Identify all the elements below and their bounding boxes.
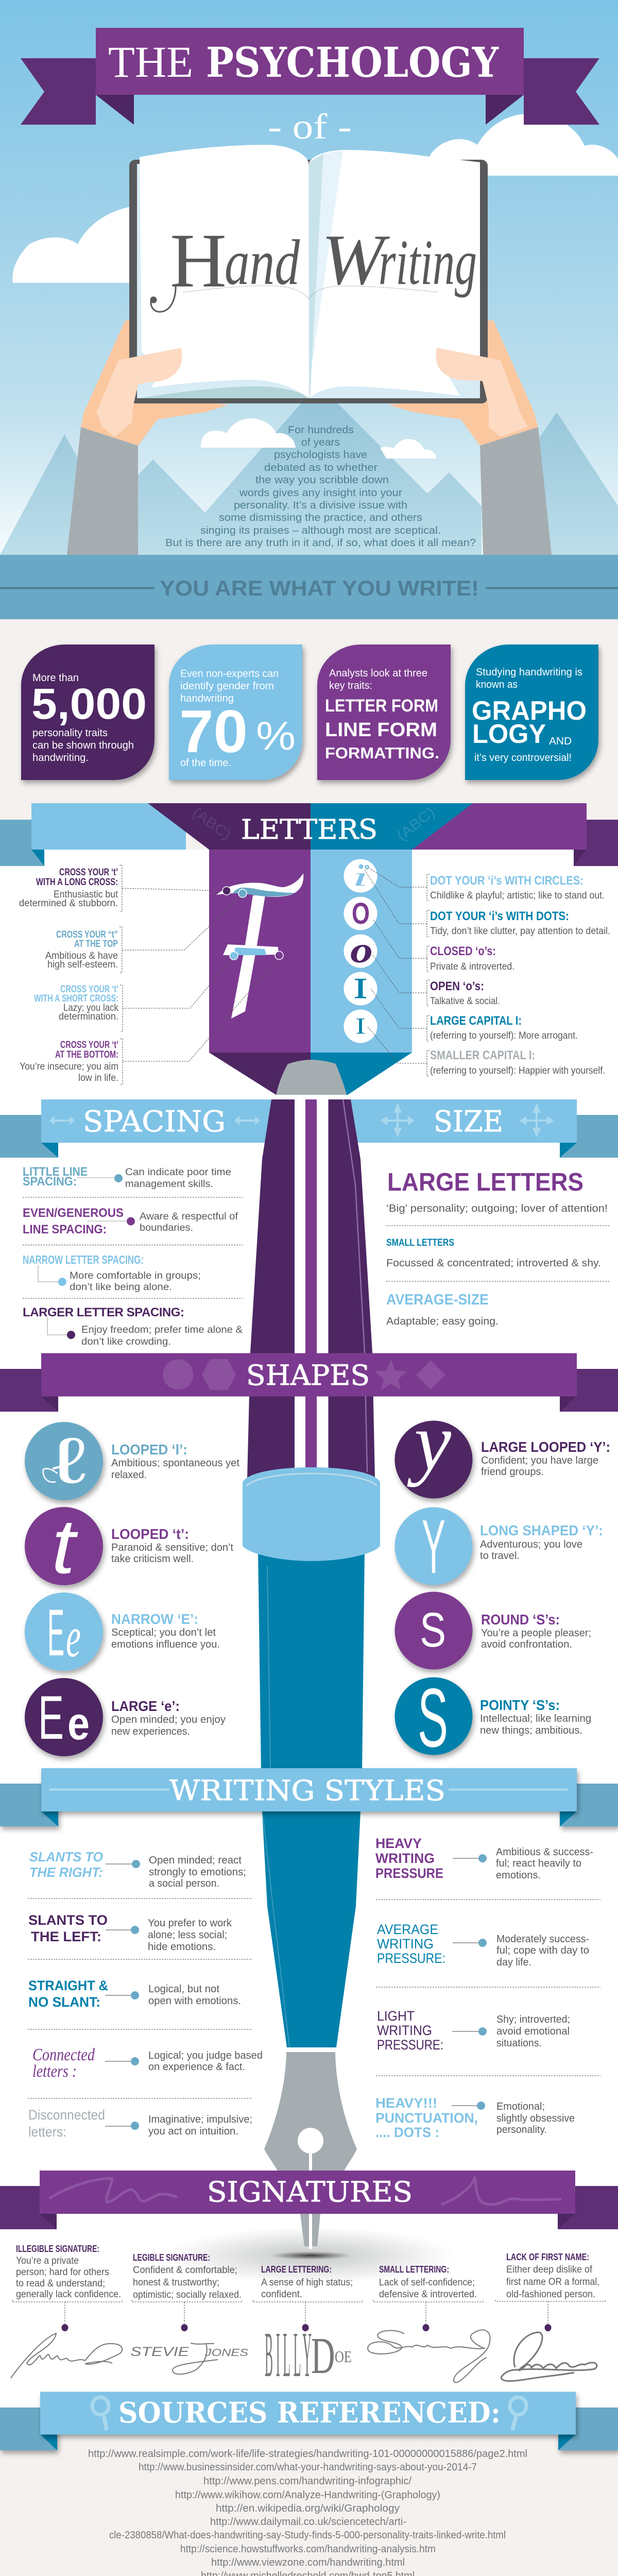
title ribbon bbox=[21, 28, 599, 125]
sources list: http://science.howstuffworks.com/handwriting-analysis.htm bbox=[180, 2544, 436, 2555]
callout: cross your t bottom: AT THE BOTTOM: bbox=[55, 1049, 118, 1060]
intro paragraph: words gives any insight into your bbox=[239, 487, 402, 499]
callout: cross your t bottom: You’re insecure; you aim bbox=[20, 1061, 118, 1072]
heading: writing styles: WRITING STYLES bbox=[169, 1774, 445, 1807]
callout: open o: OPEN ‘o’s: bbox=[430, 979, 484, 993]
card: 5,000 personality traits bbox=[21, 645, 154, 780]
shape: large looped y: friend groups. bbox=[481, 1466, 544, 1478]
signature item: illegible: generally lack confidence. bbox=[16, 2289, 121, 2300]
pen barrel bbox=[247, 1099, 375, 1479]
letters banner: (ABC) bbox=[190, 804, 234, 843]
signature item: lack of first name bbox=[495, 2252, 605, 2381]
shape: large looped y: y bbox=[407, 1396, 452, 1487]
title: the psychology bbox=[108, 37, 499, 87]
style: heavy punctuation: PUNCTUATION, bbox=[375, 2110, 478, 2126]
sources list: http://www.viewzone.com/handwriting.html bbox=[211, 2557, 405, 2568]
style: heavy pressure: WRITING bbox=[375, 1851, 435, 1866]
style: slants right: Open minded; react bbox=[149, 1855, 242, 1866]
card: 5,000 personality traits: can be shown through bbox=[32, 740, 134, 751]
intro paragraph: personality. It’s a divisive issue with bbox=[234, 500, 407, 511]
shape: narrow e: emotions influence you. bbox=[111, 1639, 220, 1650]
callout: dots bbox=[364, 869, 610, 937]
style: slants left: THE LEFT: bbox=[31, 1929, 101, 1944]
card: 70% gender: of the time. bbox=[180, 757, 231, 769]
shape: large e: Open minded; you enjoy bbox=[111, 1714, 226, 1725]
item: larger letter spacing: Enjoy freedom; prefer time alone & bbox=[81, 1325, 243, 1335]
signature item: small lettering: Lack of self-confidence; bbox=[379, 2277, 475, 2288]
item: larger letter spacing bbox=[23, 1306, 243, 1347]
item: small letters: SMALL LETTERS bbox=[386, 1238, 454, 1248]
item: average size: Adaptable; easy going. bbox=[386, 1316, 499, 1327]
style: average pressure: Moderately success- bbox=[496, 1934, 589, 1945]
shape: looped l: LOOPED ‘l’: bbox=[111, 1442, 187, 1458]
callout: cross your t long: WITH A LONG CROSS: bbox=[36, 877, 118, 888]
signatures banner bbox=[0, 2171, 618, 2229]
callout: cross your t bottom bbox=[20, 951, 283, 1084]
letter i with dot and circle bbox=[352, 862, 369, 892]
card: three key traits: LINE FORM bbox=[325, 719, 437, 741]
shape: pointy s: S bbox=[418, 1671, 448, 1765]
title: the psychology: THE bbox=[108, 37, 193, 87]
heading: sources: SOURCES REFERENCED: bbox=[118, 2396, 501, 2429]
style: slants left: hide emotions. bbox=[148, 1941, 216, 1953]
sources list bbox=[88, 2448, 527, 2576]
icon: faint scribbles bbox=[49, 2177, 561, 2205]
callout: open o bbox=[373, 955, 500, 1007]
hero sky scene bbox=[0, 0, 618, 555]
style: connected letters: Logical; you judge based bbox=[148, 2050, 263, 2061]
intro paragraph: of years bbox=[301, 437, 340, 448]
signature item: legible: optimistic; socially relaxed. bbox=[133, 2290, 242, 2300]
shape: narrow e bbox=[25, 1592, 220, 1671]
style: heavy punctuation: .... DOTS : bbox=[375, 2125, 439, 2140]
style: average pressure: day life. bbox=[496, 1957, 531, 1968]
signature item: legible: JONES bbox=[204, 2347, 249, 2359]
shape: large e: E bbox=[38, 1683, 64, 1752]
callout: large capital i bbox=[371, 989, 578, 1041]
thumbs bbox=[96, 348, 528, 437]
heading: shapes: SHAPES bbox=[246, 1359, 370, 1392]
hand writing lettering: riting bbox=[379, 227, 477, 298]
band: you are what you write: YOU ARE WHAT YOU WRITE! bbox=[160, 576, 479, 600]
callout: smaller capital i: SMALLER CAPITAL I: bbox=[430, 1048, 535, 1062]
style: light pressure: LIGHT bbox=[377, 2008, 415, 2024]
style: slants right: THE RIGHT: bbox=[29, 1865, 103, 1880]
callout: closed o: Private & introverted. bbox=[430, 961, 514, 972]
style: heavy punctuation: personality. bbox=[496, 2124, 547, 2136]
shape: long y: LONG SHAPED ‘Y’: bbox=[480, 1522, 603, 1538]
shape: pointy s: POINTY ‘S’s: bbox=[480, 1697, 560, 1713]
letter circles bbox=[344, 859, 377, 1043]
card: graphology: Studying handwriting is bbox=[476, 667, 582, 678]
style: slants right: strongly to emotions; bbox=[149, 1867, 246, 1878]
writing styles banner bbox=[0, 1768, 618, 1826]
card: 70% gender bbox=[169, 645, 302, 780]
white content panel bbox=[0, 850, 618, 2416]
shape: long y: Adventurous; you love bbox=[480, 1539, 582, 1550]
large capital i: I bbox=[354, 973, 367, 1005]
heading: size: SIZE bbox=[434, 1105, 503, 1139]
style: heavy punctuation: HEAVY!!! bbox=[375, 2095, 437, 2111]
item: large letters bbox=[386, 1168, 608, 1214]
style: heavy punctuation bbox=[375, 2095, 575, 2140]
style: light pressure bbox=[377, 2008, 570, 2053]
item: little line spacing bbox=[23, 1165, 231, 1190]
intro paragraph: But is there are any truth in it and, if so, what does it all mean? bbox=[165, 537, 476, 549]
shape: narrow e: e bbox=[66, 1605, 81, 1669]
intro paragraph: For hundreds bbox=[288, 425, 354, 436]
card: three key traits: FORMATTING. bbox=[325, 744, 439, 762]
style: slants left: alone; less social; bbox=[148, 1929, 227, 1941]
sources list: http://www.wikihow.com/Analyze-Handwriting-(Graphology) bbox=[175, 2489, 440, 2501]
shape: large e bbox=[25, 1678, 226, 1756]
intro paragraph bbox=[165, 425, 476, 549]
card: 5,000 personality traits: 5,000 bbox=[31, 680, 147, 728]
style: average pressure: ful; cope with day to bbox=[496, 1945, 589, 1956]
style: heavy pressure: PRESSURE bbox=[375, 1866, 443, 1881]
signature item: lack of first name: Either deep dislike of bbox=[506, 2264, 593, 2275]
style: average pressure: AVERAGE bbox=[377, 1922, 438, 1937]
signature item: small lettering: defensive & introverted. bbox=[379, 2289, 477, 2300]
item: even line spacing: boundaries. bbox=[140, 1223, 193, 1233]
shape: looped t: Paranoid & sensitive; don’t bbox=[111, 1542, 233, 1553]
item: small letters: Focussed & concentrated; introverted & shy. bbox=[386, 1258, 601, 1269]
signature item: legible: LEGIBLE SIGNATURE: bbox=[133, 2252, 210, 2263]
callout: smaller capital i bbox=[367, 1026, 605, 1076]
sources list: http://www.dailymail.co.uk/sciencetech/arti- bbox=[210, 2516, 406, 2528]
card: 5,000 personality traits: personality traits bbox=[32, 727, 108, 739]
shape: looped t: take criticism well. bbox=[111, 1553, 194, 1565]
pen cap and lower barrel bbox=[243, 1467, 380, 2047]
card: graphology: known as bbox=[476, 679, 518, 690]
item: large letters: LARGE LETTERS bbox=[387, 1168, 583, 1196]
intro paragraph: the way you scribble down bbox=[255, 474, 389, 486]
card: graphology: it’s very controversial! bbox=[474, 752, 572, 764]
style: connected letters: Connected bbox=[32, 2045, 95, 2064]
intro paragraph: psychologists have bbox=[274, 449, 367, 461]
style: light pressure: avoid emotional bbox=[496, 2026, 570, 2037]
signature item: legible: honest & trustworthy; bbox=[133, 2277, 219, 2288]
callout: open o: Talkative & social. bbox=[430, 996, 500, 1007]
card: 70% gender: Even non-experts can bbox=[180, 668, 279, 680]
callout: large capital i: LARGE CAPITAL I: bbox=[430, 1014, 522, 1028]
icon: faint shapes bbox=[163, 1359, 445, 1390]
shape: large looped y: Confident; you have large bbox=[481, 1455, 598, 1466]
shape: looped l: Ambitious; spontaneous yet bbox=[111, 1458, 239, 1469]
callout: smaller capital i: (referring to yourself): Happier with yourself. bbox=[430, 1065, 605, 1076]
sources list: http://www.businessinsider.com/what-your-handwriting-says-about-you-2014-7 bbox=[139, 2462, 477, 2473]
item: larger letter spacing: don’t like crowding. bbox=[81, 1336, 171, 1347]
style: light pressure: WRITING bbox=[377, 2023, 432, 2038]
style: slants right: SLANTS TO bbox=[29, 1849, 103, 1865]
icon: size arrows bbox=[381, 1103, 554, 1138]
callout: cross your t short: WITH A SHORT CROSS: bbox=[34, 993, 118, 1004]
style: straight bbox=[28, 1978, 241, 2010]
card: 70% gender: % bbox=[256, 713, 296, 758]
item: narrow letter spacing bbox=[23, 1253, 201, 1293]
hand writing lettering: W bbox=[321, 220, 390, 300]
shape: round s: ROUND ‘S’s: bbox=[481, 1612, 560, 1628]
hand writing lettering: and bbox=[225, 227, 300, 298]
card: graphology: GRAPHO bbox=[472, 696, 587, 726]
style: light pressure: situations. bbox=[496, 2038, 542, 2049]
style: disconnected letters: you act on intuition. bbox=[148, 2126, 238, 2137]
shape: round s: S bbox=[420, 1603, 446, 1657]
shape: round s: You’re a people pleaser; bbox=[481, 1628, 591, 1639]
item: narrow letter spacing: don’t like being alone. bbox=[70, 1282, 172, 1293]
style: slants right bbox=[29, 1849, 246, 1889]
callout: cross your t top: Ambitious & have bbox=[45, 951, 118, 961]
item: even line spacing: Aware & respectful of bbox=[140, 1211, 238, 1222]
signature item: legible: STEVIE bbox=[130, 2345, 189, 2359]
style: slants left bbox=[28, 1912, 232, 1953]
item: even line spacing: EVEN/GENEROUS bbox=[23, 1206, 124, 1220]
hand writing lettering: H bbox=[170, 218, 227, 303]
callout: cross your t top: CROSS YOUR “t” bbox=[56, 929, 118, 940]
callout: cross your t top: high self-esteem. bbox=[47, 959, 118, 970]
spacing and size banner bbox=[0, 1099, 618, 1158]
shape: looped t: LOOPED ‘t’: bbox=[111, 1526, 189, 1542]
callout: cross your t short: CROSS YOUR ‘t’ bbox=[60, 984, 118, 995]
heading: signatures: SIGNATURES bbox=[207, 2176, 413, 2208]
style: slants left: You prefer to work bbox=[148, 1918, 232, 1929]
style: heavy punctuation: slightly obsessive bbox=[496, 2113, 575, 2124]
item: large letters: ‘Big’ personality; outgoing; lover of attention! bbox=[386, 1203, 608, 1214]
item: little line spacing: management skills. bbox=[125, 1179, 213, 1190]
signature item: legible: Confident & comfortable; bbox=[133, 2265, 237, 2276]
signature item: lack of first name: LACK OF FIRST NAME: bbox=[506, 2252, 589, 2262]
icon: spacing arrows bbox=[49, 1116, 260, 1125]
callout: dots circles bbox=[369, 868, 605, 901]
callout: closed o: CLOSED ‘o’s: bbox=[430, 944, 496, 958]
card: 70% gender: handwriting bbox=[180, 693, 234, 704]
shape: long y bbox=[394, 1504, 603, 1589]
item: little line spacing: LITTLE LINE bbox=[23, 1165, 88, 1179]
callout: cross your t short: Lazy; you lack bbox=[63, 1003, 118, 1013]
callout: large capital i: (referring to yourself): More arrogant. bbox=[430, 1030, 578, 1041]
subtitle: of: - of - bbox=[268, 107, 352, 147]
signature item: large lettering: BILLY bbox=[265, 2319, 312, 2391]
style: straight: NO SLANT: bbox=[28, 1994, 100, 2010]
card: three key traits: Analysts look at three bbox=[329, 668, 427, 679]
signature item: large lettering: LARGE LETTERING: bbox=[261, 2264, 332, 2275]
shape: looped t: t bbox=[52, 1503, 78, 1589]
shape: large looped y bbox=[394, 1396, 610, 1498]
style: connected letters: on experience & fact. bbox=[148, 2061, 245, 2073]
intro paragraph: some dismissing the practice, and others bbox=[219, 512, 422, 523]
signature item: legible bbox=[130, 2252, 249, 2374]
signature item: illegible bbox=[11, 2244, 122, 2378]
callout: cross your t long: CROSS YOUR ‘t’ bbox=[59, 867, 118, 878]
item: larger letter spacing: LARGER LETTER SPACING: bbox=[23, 1306, 184, 1319]
callout: cross your t long: Enthusiastic but bbox=[54, 889, 118, 900]
signature item: large lettering: D bbox=[311, 2327, 335, 2384]
signature item: large lettering bbox=[253, 2264, 363, 2391]
style: disconnected letters bbox=[28, 2107, 252, 2140]
style: light pressure: PRESSURE: bbox=[377, 2037, 443, 2053]
shape: pointy s bbox=[394, 1671, 591, 1765]
callout: cross your t long bbox=[19, 865, 231, 911]
sleeve cuffs bbox=[67, 427, 552, 555]
card: 70% gender: 70 bbox=[179, 698, 248, 765]
shape: narrow e: NARROW ‘E’: bbox=[111, 1611, 198, 1627]
shape: pointy s: Intellectual; like learning bbox=[480, 1713, 591, 1724]
style: connected letters bbox=[32, 2045, 263, 2081]
item: average size bbox=[386, 1292, 499, 1327]
sources banner bbox=[0, 2392, 618, 2450]
title: the psychology: PSYCHOLOGY bbox=[206, 38, 499, 87]
style: heavy pressure: emotions. bbox=[496, 1870, 541, 1881]
shape: round s bbox=[394, 1592, 591, 1669]
icon: magnifying glasses bbox=[92, 2397, 526, 2430]
letters banner bbox=[0, 803, 618, 866]
signature item: large lettering: A sense of high status; bbox=[261, 2277, 353, 2288]
style: slants right: a social person. bbox=[149, 1878, 219, 1889]
closed o: O bbox=[352, 897, 370, 930]
card: 5,000 personality traits: handwriting. bbox=[32, 752, 89, 764]
signature item: large lettering: OE bbox=[335, 2347, 352, 2366]
shapes banner bbox=[0, 1353, 618, 1412]
sources list: cle-2380858/What-does-handwriting-say-Study-finds-5-000-personality-traits-linked-write.html bbox=[109, 2530, 506, 2541]
signature item: illegible: You’re a private bbox=[16, 2256, 79, 2266]
style: heavy pressure bbox=[375, 1836, 593, 1881]
style: heavy pressure: HEAVY bbox=[375, 1836, 422, 1851]
letters banner: (ABC) bbox=[393, 804, 438, 844]
shape: large e: new experiences. bbox=[111, 1726, 190, 1737]
shape: large e: e bbox=[67, 1698, 90, 1750]
callout: cross your t top bbox=[45, 889, 247, 973]
card: three key traits bbox=[317, 645, 451, 780]
card: three key traits: LETTER FORM bbox=[325, 696, 438, 716]
shape: looped t bbox=[25, 1503, 233, 1589]
hand writing lettering bbox=[150, 218, 477, 312]
intro paragraph: debated as to whether bbox=[264, 462, 377, 473]
style: straight: open with emotions. bbox=[148, 1995, 241, 2007]
shape: long y: Y bbox=[422, 1504, 445, 1589]
style: disconnected letters: Imaginative; impulsive; bbox=[148, 2114, 252, 2125]
style: heavy pressure: Ambitious & success- bbox=[496, 1846, 593, 1858]
card: graphology: LOGY bbox=[472, 719, 546, 749]
style: slants left: SLANTS TO bbox=[28, 1912, 108, 1928]
pen top: letters panels bbox=[209, 850, 412, 1095]
style: average pressure bbox=[377, 1922, 589, 1968]
style: disconnected letters: Disconnected bbox=[28, 2107, 105, 2123]
shape: large e: LARGE ‘e’: bbox=[111, 1698, 180, 1714]
callout: cross your t long: determined & stubborn. bbox=[19, 898, 118, 909]
callout: cross your t short bbox=[34, 952, 238, 1031]
card: three key traits: key traits: bbox=[329, 680, 372, 691]
signature item: small lettering bbox=[368, 2264, 490, 2382]
item: narrow letter spacing: More comfortable in groups; bbox=[70, 1270, 201, 1281]
callout: dots circles: Childlike & playful; artistic; like to stand out. bbox=[430, 890, 605, 901]
shape: pointy s: new things; ambitious. bbox=[480, 1725, 582, 1736]
signature item: lack of first name: first name OR a formal, bbox=[506, 2277, 599, 2287]
card: 5,000 personality traits: More than bbox=[32, 672, 79, 684]
card: 70% gender: identify gender from bbox=[180, 681, 274, 692]
style: average pressure: PRESSURE: bbox=[377, 1951, 445, 1966]
open book illustration bbox=[129, 145, 488, 403]
letter i with dot and circle: ı bbox=[352, 862, 369, 892]
heading: letters: LETTERS bbox=[241, 815, 377, 845]
heading: spacing: SPACING bbox=[83, 1105, 226, 1139]
small capital i: I bbox=[355, 1013, 366, 1039]
sources list: http://en.wikipedia.org/wiki/Graphology bbox=[216, 2503, 400, 2514]
style: straight: STRAIGHT & bbox=[28, 1978, 108, 1993]
callout: cross your t top: AT THE TOP bbox=[74, 939, 118, 950]
intro paragraph: singing its praises – although most are sceptical. bbox=[200, 525, 441, 536]
item: little line spacing: SPACING: bbox=[23, 1175, 77, 1189]
shape: looped l: ℓ bbox=[52, 1425, 87, 1497]
signature item: illegible: to read & understand; bbox=[16, 2278, 105, 2289]
item: even line spacing bbox=[23, 1206, 238, 1236]
sources list: http://www.realsimple.com/work-life/life-strategies/handwriting-101-00000000015886/page2.html bbox=[88, 2448, 527, 2460]
callout: cross your t short: determination. bbox=[59, 1011, 118, 1022]
card: graphology: AND bbox=[549, 736, 572, 747]
pen nib bbox=[166, 2052, 455, 2284]
hands behind book bbox=[81, 320, 538, 446]
callout: cross your t bottom: low in life. bbox=[78, 1073, 118, 1083]
signature item: small lettering: SMALL LETTERING: bbox=[379, 2264, 449, 2275]
signature item: lack of first name: old-fashioned person. bbox=[506, 2289, 595, 2300]
shape: narrow e: Sceptical; you don’t let bbox=[111, 1627, 216, 1638]
sources list: http://www.pens.com/handwriting-infographic/ bbox=[203, 2476, 411, 2487]
item: little line spacing: Can indicate poor time bbox=[125, 1167, 231, 1178]
item: narrow letter spacing: NARROW LETTER SPACING: bbox=[23, 1253, 144, 1266]
callout: dots circles: DOT YOUR ‘i’s WITH CIRCLES: bbox=[430, 874, 583, 888]
callout: cross your t bottom: CROSS YOUR ‘t’ bbox=[60, 1040, 118, 1050]
style: straight: Logical, but not bbox=[148, 1984, 219, 1995]
illustration: letter t with crosses bbox=[216, 873, 303, 1019]
style: heavy pressure: ful; react heavily to bbox=[496, 1858, 581, 1869]
style: disconnected letters: letters: bbox=[28, 2124, 66, 2140]
shape: round s: avoid confrontation. bbox=[481, 1639, 572, 1650]
item: even line spacing: LINE SPACING: bbox=[23, 1223, 107, 1236]
signature item: illegible: ILLEGIBLE SIGNATURE: bbox=[16, 2244, 99, 2254]
style: average pressure: WRITING bbox=[377, 1936, 434, 1952]
callout: dots: Tidy, don’t like clutter, pay attention to detail. bbox=[430, 926, 610, 937]
signature item: large lettering: confident. bbox=[261, 2289, 302, 2300]
signature item: illegible: person; hard for others bbox=[16, 2267, 109, 2278]
style: heavy punctuation: Emotional; bbox=[496, 2101, 545, 2112]
item: small letters bbox=[386, 1238, 601, 1269]
style: connected letters: letters : bbox=[32, 2062, 77, 2081]
callout: dots: DOT YOUR ‘i’s WITH DOTS: bbox=[430, 909, 569, 923]
shape: narrow e: E bbox=[47, 1596, 64, 1670]
open o: o bbox=[350, 929, 373, 971]
callout: closed o bbox=[373, 919, 514, 972]
shape: looped l bbox=[25, 1422, 239, 1500]
band: you are what you write bbox=[0, 555, 618, 619]
shape: long y: to travel. bbox=[480, 1550, 520, 1562]
style: light pressure: Shy; introverted; bbox=[496, 2014, 570, 2025]
shape: looped l: relaxed. bbox=[111, 1469, 147, 1481]
card: graphology bbox=[465, 645, 598, 780]
item: average size: AVERAGE-SIZE bbox=[386, 1292, 489, 1308]
